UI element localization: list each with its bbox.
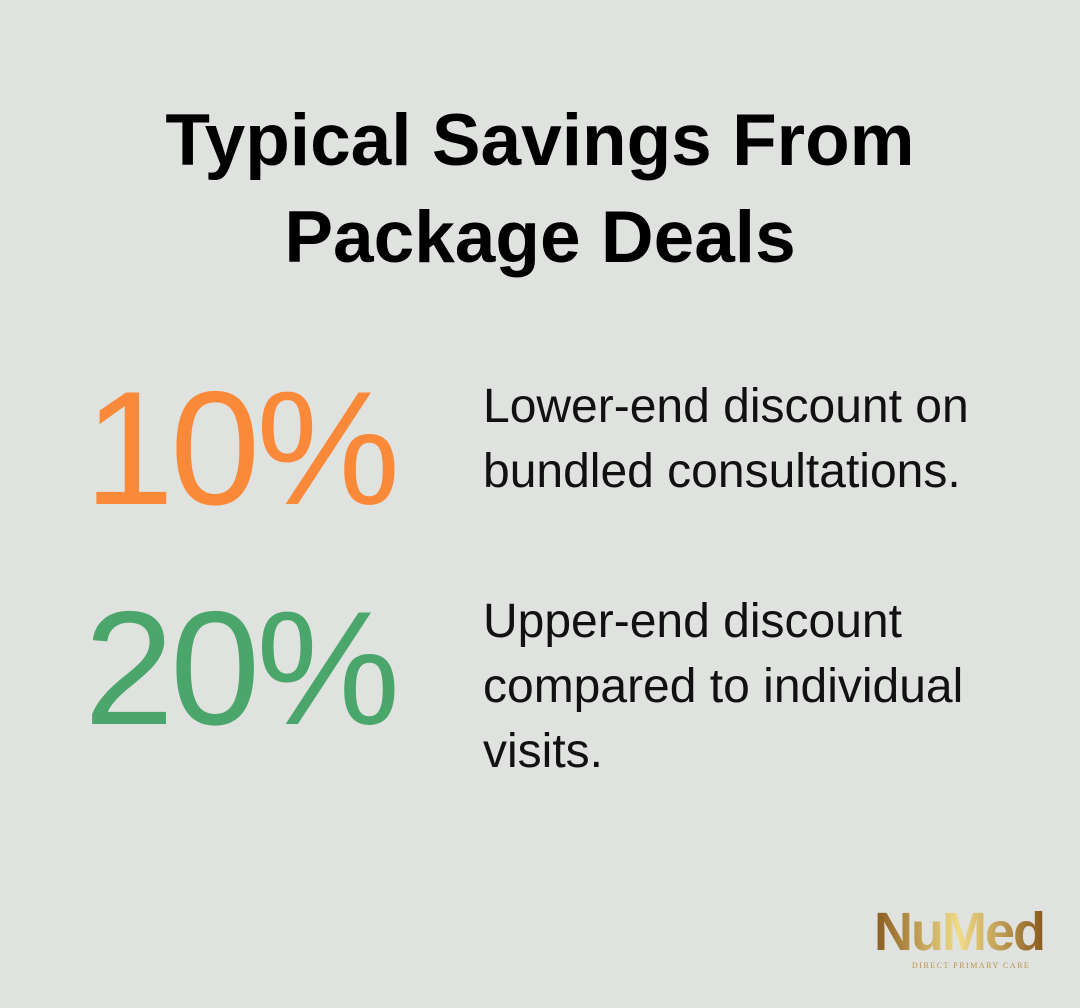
text: 20% description: Upper-end discount (483, 595, 902, 648)
text: 10% description: Lower-end discount on (483, 380, 969, 433)
title (165, 100, 915, 278)
text: 10% description (483, 380, 969, 498)
stat: 10%: 10% (84, 358, 396, 539)
text: 10% description: bundled consultations. (483, 445, 961, 498)
title: Typical Savings From (165, 100, 915, 181)
logo: NuMed: NuMed (874, 902, 1044, 962)
logo: NuMed: DIRECT PRIMARY CARE (912, 961, 1030, 970)
text: 20% description: compared to individual (483, 660, 963, 713)
text: 20% description (483, 595, 963, 778)
title: Package Deals (284, 197, 796, 278)
text: 20% description: visits. (483, 725, 603, 778)
stat: 20%: 20% (84, 578, 396, 759)
